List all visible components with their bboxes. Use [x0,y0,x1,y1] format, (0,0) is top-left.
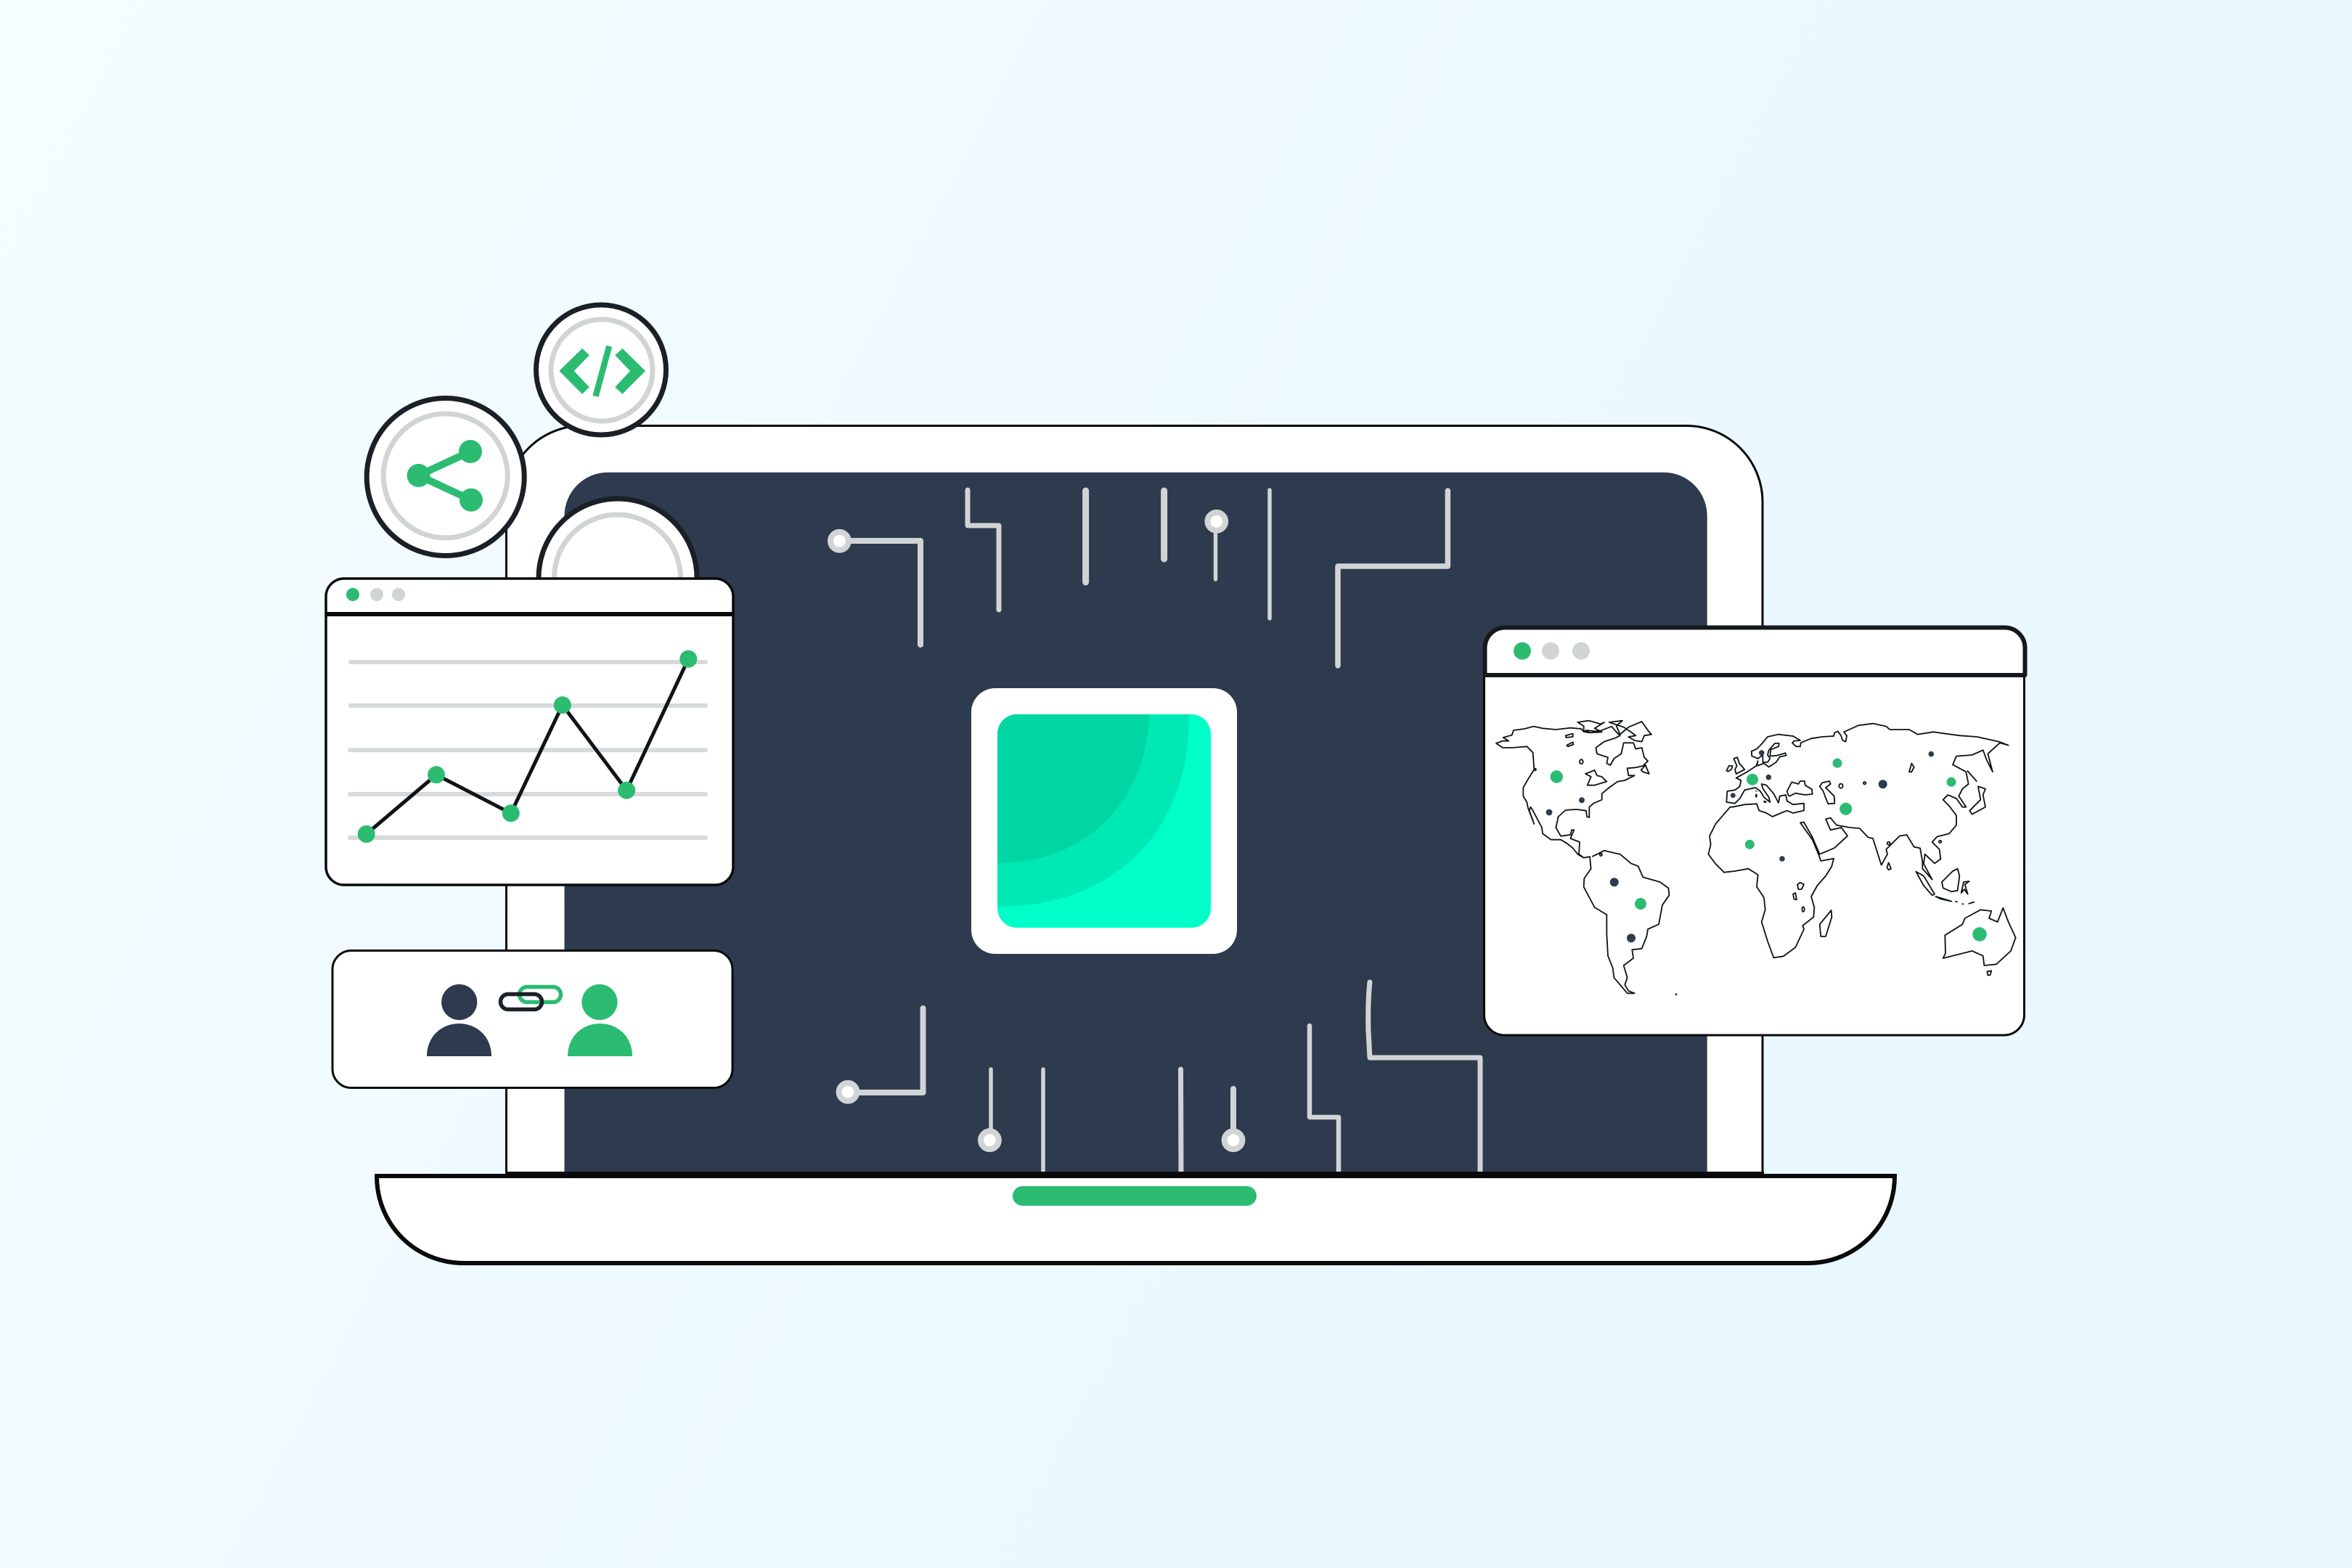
central chip [971,688,1237,954]
map: location dots [1546,750,1987,995]
icon: chain link [501,987,560,1009]
icon: dark user [427,984,491,1056]
map: Eurasia and Africa [1708,724,2016,975]
circuit traces: top [830,490,1447,666]
chart grid lines and data [350,650,706,843]
laptop screen [564,473,1707,1173]
laptop lid [506,425,1763,1173]
map: Americas [1496,721,1669,993]
laptop base [377,1172,1895,1263]
icon: share badge [367,398,524,556]
icon: code badge [536,305,666,435]
circuit traces: bottom [839,982,1480,1176]
icon: green user [568,984,632,1056]
panel: linked users card [332,951,732,1087]
icon: hidden circle behind chart window [539,499,697,657]
panel: world map window [1484,627,2025,1035]
panel: line chart window [325,579,735,885]
